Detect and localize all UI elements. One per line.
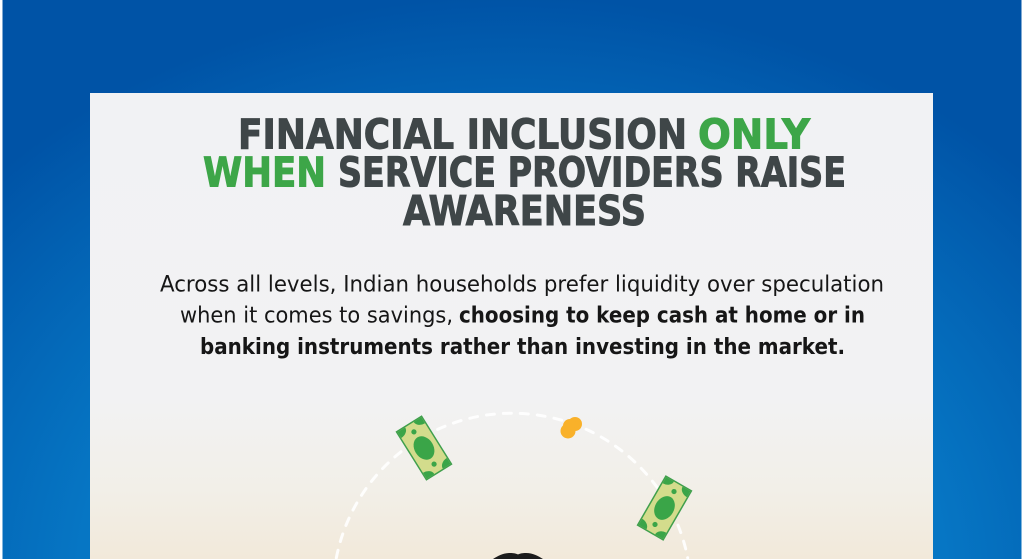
title: FINANCIAL INCLUSION <box>238 110 687 158</box>
title: SERVICE PROVIDERS RAISE <box>338 149 846 197</box>
icon: head top <box>493 553 543 559</box>
icon: banknote left <box>395 415 453 481</box>
dashed arc <box>336 413 688 558</box>
title: WHEN <box>203 149 326 197</box>
title: AWARENESS <box>403 187 646 235</box>
icon: coins <box>560 417 582 438</box>
intro text: Across all levels, Indian households prefer liquidity over speculation <box>160 272 884 298</box>
intro text: banking instruments rather than investing in the market. <box>200 334 845 360</box>
title: ONLY <box>698 110 811 158</box>
intro text <box>160 272 884 360</box>
panel: content card <box>90 93 933 559</box>
icon: banknote right <box>637 475 692 541</box>
title <box>203 110 846 235</box>
intro text: choosing to keep cash at home or in <box>459 302 865 328</box>
intro text: when it comes to savings, <box>180 302 453 328</box>
